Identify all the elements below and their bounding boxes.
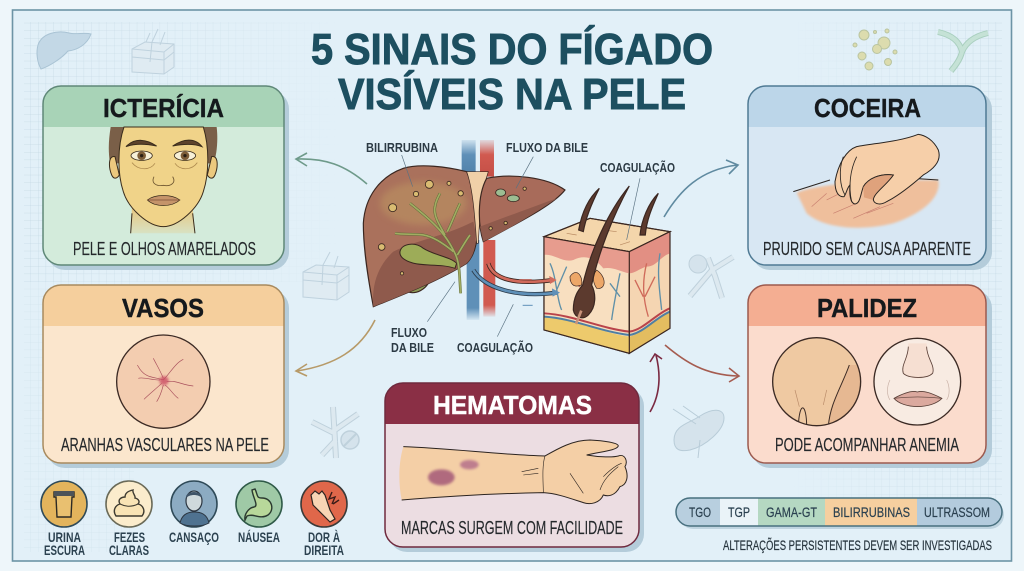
caption: MARCAS SURGEM COM FACILIDADE	[401, 517, 623, 538]
lab tests bar: ULTRASSOM	[924, 504, 990, 520]
icon: scratching hand	[793, 134, 939, 228]
icon: cansaço	[169, 481, 219, 545]
arrow: bruises to skin	[650, 354, 662, 412]
arrow: skin to itching	[664, 160, 738, 217]
icon: pale face circle	[874, 338, 961, 425]
panel: hematomas	[385, 383, 644, 552]
heading: ICTERÍCIA	[103, 93, 224, 123]
heading: COCEIRA	[814, 93, 921, 123]
arrow: liver to vessels	[296, 320, 375, 376]
panel: vasos	[43, 285, 289, 468]
icon: dor à direita: DIREITA	[304, 542, 344, 558]
icon: cansaço: CANSAÇO	[169, 529, 219, 545]
icon: náusea	[236, 481, 282, 545]
lab tests bar: BILIRRUBINAS	[833, 504, 910, 520]
icon: ghost vessels	[689, 255, 733, 298]
icon: fezes claras: FEZES	[114, 529, 145, 545]
lab tests bar: TGO	[689, 504, 711, 520]
icon: ghost liver	[37, 32, 91, 69]
labels: anatomy	[366, 140, 675, 355]
labels: anatomy: COAGULAÇÃO	[457, 340, 533, 355]
panel: icterícia	[43, 86, 289, 270]
title: 5 SINAIS DO FÍGADO	[311, 24, 713, 74]
caption: PELE E OLHOS AMARELADOS	[73, 238, 256, 259]
caption: ARANHAS VASCULARES NA PELE	[61, 434, 269, 455]
symptom icons row	[41, 481, 347, 558]
liver	[363, 166, 565, 307]
heading: HEMATOMAS	[433, 390, 592, 420]
lab tests bar: TGP	[728, 504, 750, 520]
icon: bruised arm	[399, 440, 627, 504]
icon: náusea: NÁUSEA	[238, 529, 280, 545]
icon: ghost skin block center	[303, 252, 349, 300]
skin block	[544, 186, 670, 353]
labels: anatomy: DA BILE	[391, 340, 434, 355]
lab tests bar: GAMA-GT	[766, 504, 817, 520]
icon: ghost gallbladder	[673, 406, 724, 458]
icon: dor à direita	[301, 481, 347, 558]
illustration: liver and skin	[363, 140, 670, 353]
icon: pale skin circle	[773, 338, 863, 427]
bile and blood flow arrows	[473, 263, 560, 305]
vessels	[462, 140, 495, 320]
heading: VASOS	[122, 293, 204, 323]
title: VISÍVEIS NA PELE	[338, 69, 686, 119]
icon: spider veins circle	[117, 335, 210, 428]
panel: coceira	[748, 86, 992, 270]
icon: ghost vessel with pill	[312, 407, 359, 458]
icon: ghost skin block	[132, 29, 174, 74]
labels: anatomy: COAGULAÇÃO	[600, 160, 675, 175]
labels: anatomy: BILIRRUBINA	[366, 140, 439, 155]
icon: ghost bubbles	[853, 29, 897, 70]
leader lines	[402, 155, 640, 337]
icon: urina escura: URINA	[48, 529, 81, 545]
icon: fezes claras: CLARAS	[109, 542, 149, 558]
arrow: skin to pallor	[665, 345, 739, 382]
panel: palidez	[748, 285, 992, 468]
icon: fezes claras	[106, 481, 152, 558]
heading: PALIDEZ	[817, 293, 917, 323]
icon: yellow face	[109, 127, 217, 233]
title	[311, 24, 713, 119]
arrow: liver to jaundice	[296, 153, 367, 184]
labels: anatomy: FLUXO DA BILE	[506, 140, 588, 155]
icon: dor à direita: DOR À	[308, 529, 340, 545]
labels: anatomy: FLUXO	[391, 325, 427, 340]
lab tests bar	[676, 498, 1004, 529]
icon: urina escura: ESCURA	[44, 542, 85, 558]
icon: urina escura	[41, 481, 87, 558]
icon: ghost bile duct	[938, 32, 988, 71]
